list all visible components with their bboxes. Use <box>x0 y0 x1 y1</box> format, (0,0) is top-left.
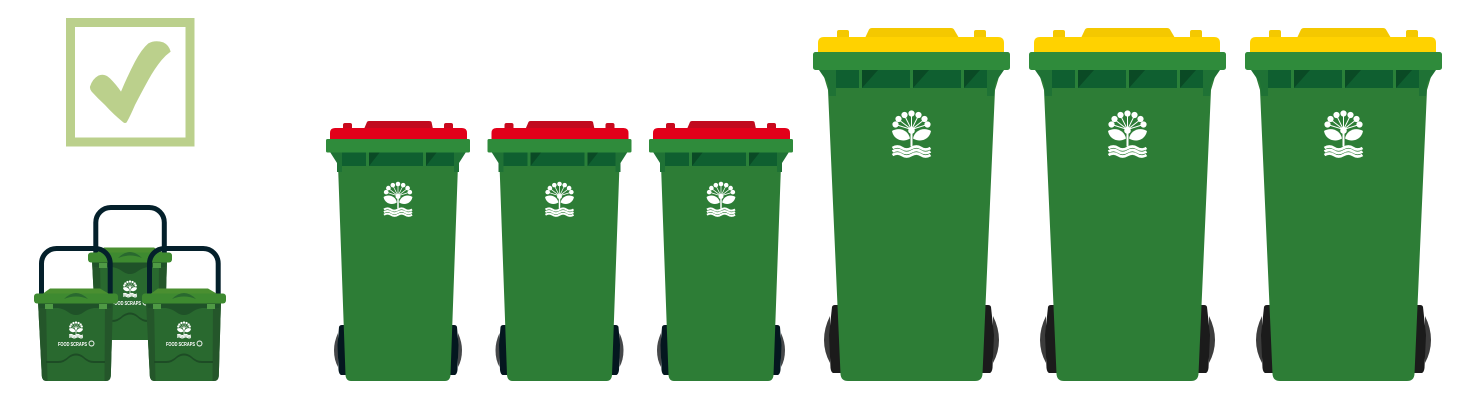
caddy: back: FOOD SCRAPS <box>112 301 141 307</box>
bin: yellow lid 2 <box>1029 28 1226 381</box>
icon: check mark box <box>70 22 190 142</box>
caddy: front left: FOOD SCRAPS <box>58 342 87 348</box>
bin: red lid 1 <box>326 121 470 381</box>
caddy: front right <box>142 248 226 381</box>
bin: red lid 3 <box>649 121 793 381</box>
bin: red lid 2 <box>488 121 632 381</box>
caddy: back <box>88 208 172 340</box>
caddy: front left <box>34 248 118 381</box>
caddy: front right: FOOD SCRAPS <box>166 342 195 348</box>
bin: yellow lid 3 <box>1245 28 1442 381</box>
bin: yellow lid 1 <box>813 28 1010 381</box>
food scraps caddies group <box>34 208 226 381</box>
